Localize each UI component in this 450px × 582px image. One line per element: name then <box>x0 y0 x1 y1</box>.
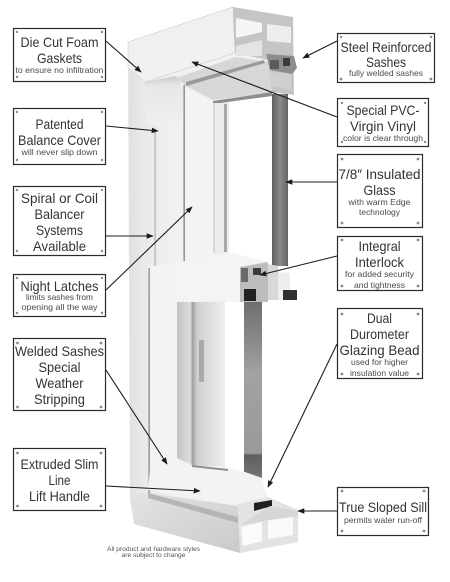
callout: night latches: limits sashes from <box>26 292 93 302</box>
callout: spiral or coil balancer: Available <box>33 238 86 254</box>
callout: spiral or coil balancer: Spiral or Coil <box>21 190 98 206</box>
callout: die cut foam gaskets: Die Cut Foam <box>20 34 98 50</box>
callout: special pvc virgin vinyl: color is clear through <box>343 133 423 143</box>
callout: welded sashes: Special <box>38 359 80 375</box>
callout: special pvc virgin vinyl <box>338 98 428 146</box>
footnote: are subject to change <box>122 552 186 559</box>
callout: patented balance cover: Balance Cover <box>18 132 101 148</box>
lower glass <box>244 302 262 480</box>
callout: insulated glass: with warm Edge <box>347 197 411 207</box>
window cross-section <box>128 7 298 553</box>
callout: insulated glass: technology <box>359 207 401 217</box>
callout: insulated glass: 7/8″ Insulated <box>338 166 420 182</box>
callout: special pvc virgin vinyl: Special PVC- <box>346 102 420 118</box>
callout: spiral or coil balancer <box>14 186 106 256</box>
callout: steel reinforced sashes: Steel Reinforced <box>340 39 432 55</box>
interlock details <box>241 264 297 301</box>
top profile <box>233 7 297 95</box>
callout: welded sashes: Welded Sashes <box>15 343 104 359</box>
callout: welded sashes <box>14 338 106 410</box>
callout: dual durometer glazing bead: used for higher <box>351 357 408 367</box>
sill <box>132 493 298 553</box>
callout: integral interlock: for added security <box>345 269 415 279</box>
callout: night latches: Night Latches <box>20 278 98 294</box>
callout: true sloped sill <box>338 488 428 536</box>
upper glass <box>272 94 288 266</box>
callout: extruded slim line lift handle: Line <box>48 472 71 488</box>
callout: insulated glass: Glass <box>364 182 396 198</box>
arrows <box>106 41 337 511</box>
callout: night latches: opening all the way <box>22 302 98 312</box>
callout: patented balance cover: Patented <box>36 116 84 132</box>
footnote <box>107 546 201 559</box>
callout: integral interlock: Interlock <box>355 254 405 270</box>
callout: extruded slim line lift handle <box>14 448 106 510</box>
frame body <box>128 7 298 553</box>
upper sash jamb <box>154 85 229 266</box>
callout: special pvc virgin vinyl: Virgin Vinyl <box>350 118 416 134</box>
jamb shadow below head <box>145 76 183 125</box>
meeting rail <box>148 253 268 302</box>
lower sash interior <box>177 302 225 466</box>
callout: integral interlock <box>338 236 422 290</box>
callout: dual durometer glazing bead: Dual <box>367 310 392 326</box>
callout: night latches <box>14 274 106 316</box>
callout: extruded slim line lift handle: Lift Handle <box>29 488 90 504</box>
head soffit <box>176 57 272 100</box>
head face <box>128 7 235 82</box>
callout: die cut foam gaskets: to ensure no infiltration <box>16 65 104 75</box>
callout: steel reinforced sashes: Sashes <box>366 54 406 70</box>
bottom rail <box>148 458 268 504</box>
callout: integral interlock: Integral <box>358 238 400 254</box>
callout: steel reinforced sashes <box>338 34 434 82</box>
callout: patented balance cover <box>14 108 106 164</box>
callout: spiral or coil balancer: Systems <box>36 222 83 238</box>
callout: true sloped sill: permits water run-off <box>344 515 423 525</box>
lower sash stile <box>150 267 177 490</box>
callout: steel reinforced sashes: fully welded sashes <box>349 68 423 78</box>
callout: patented balance cover: will never slip down <box>20 147 98 157</box>
callout: dual durometer glazing bead <box>338 308 422 378</box>
callout: welded sashes: Stripping <box>34 391 85 407</box>
callout: insulated glass <box>338 154 422 228</box>
callout: die cut foam gaskets <box>14 28 106 82</box>
callout: integral interlock: and tightness <box>354 280 405 290</box>
footnote: All product and hardware styles <box>107 546 201 553</box>
callout: dual durometer glazing bead: Durometer <box>350 326 409 342</box>
callout: spiral or coil balancer: Balancer <box>34 206 85 222</box>
callout: welded sashes: Weather <box>36 375 84 391</box>
callout: dual durometer glazing bead: insulation value <box>350 368 409 378</box>
callout: extruded slim line lift handle: Extruded Slim <box>20 456 98 472</box>
callout: dual durometer glazing bead: Glazing Bead <box>340 342 420 358</box>
callout: true sloped sill: True Sloped Sill <box>339 499 427 515</box>
callout: die cut foam gaskets: Gaskets <box>37 50 82 66</box>
